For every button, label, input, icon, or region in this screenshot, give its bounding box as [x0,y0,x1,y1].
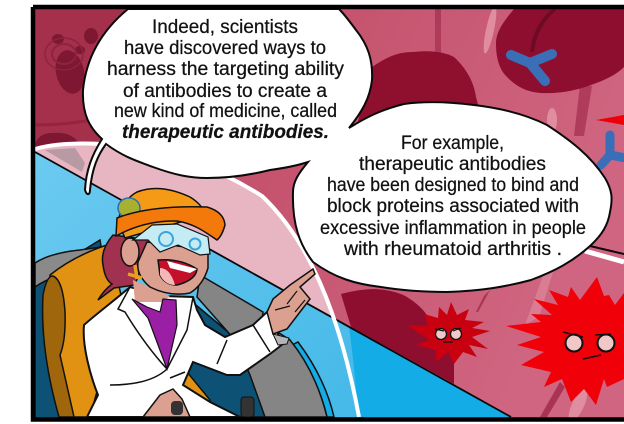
text: second bubble: therapeutic antibodies [359,154,546,175]
blue interior panel [35,152,358,417]
red spike fragment, right edge [596,115,624,125]
purple shirt [132,299,177,369]
console [35,240,334,420]
antibody, right edge [601,135,624,165]
cells in vessel wall, upper left [35,28,98,149]
helmet badge [118,198,140,218]
text: second bubble: have been designed to bind and [327,175,579,196]
text: first bubble: have discovered ways to [124,38,326,59]
mouth [158,260,197,285]
text: second bubble: with rheumatoid arthritis . [343,239,562,260]
antibody, upper right [511,54,552,81]
text: first bubble: harness the targeting ability [107,59,344,80]
speech bubbles [83,9,612,292]
cockpit window glass [35,144,357,417]
goggles [133,224,210,255]
pointing hand [267,269,315,334]
inflammatory protein, small [407,302,490,364]
ear [121,238,139,266]
coat creases [110,287,270,385]
pilot seat [43,244,210,417]
blue exterior hull [341,322,511,417]
hair [98,235,150,300]
text: first bubble: new kind of medicine, called [114,101,337,122]
inflammatory protein, large [506,277,624,405]
text: second bubble: For example, [401,133,504,154]
neck [133,280,170,302]
cuff [273,334,289,345]
helmet dome [118,188,205,238]
lab coat [84,287,283,417]
lower hand [143,389,190,417]
window streak [45,148,85,172]
joystick [241,397,254,417]
face [138,242,208,294]
text: first bubble [107,17,344,143]
earring [128,265,142,279]
hull edge line [35,152,511,417]
tail line and frame, right edge [585,246,624,262]
text: first bubble: therapeutic antibodies. [122,122,329,143]
scientist [84,188,315,417]
cockpit dome frame [35,144,359,417]
text: second bubble: excessive inflammation in people [320,218,586,239]
red blood cell, upper right [496,9,624,93]
joystick in hand [171,401,183,415]
text: second bubble: block proteins associated with [327,196,579,217]
text: second bubble [320,133,586,260]
dark red cell behind cockpit [341,289,454,384]
text: first bubble: of antibodies to create a [123,81,327,102]
helmet brim [116,207,225,240]
cell crease [532,9,555,52]
text: first bubble: Indeed, scientists [152,17,298,38]
red blood cell, centre [357,51,480,125]
